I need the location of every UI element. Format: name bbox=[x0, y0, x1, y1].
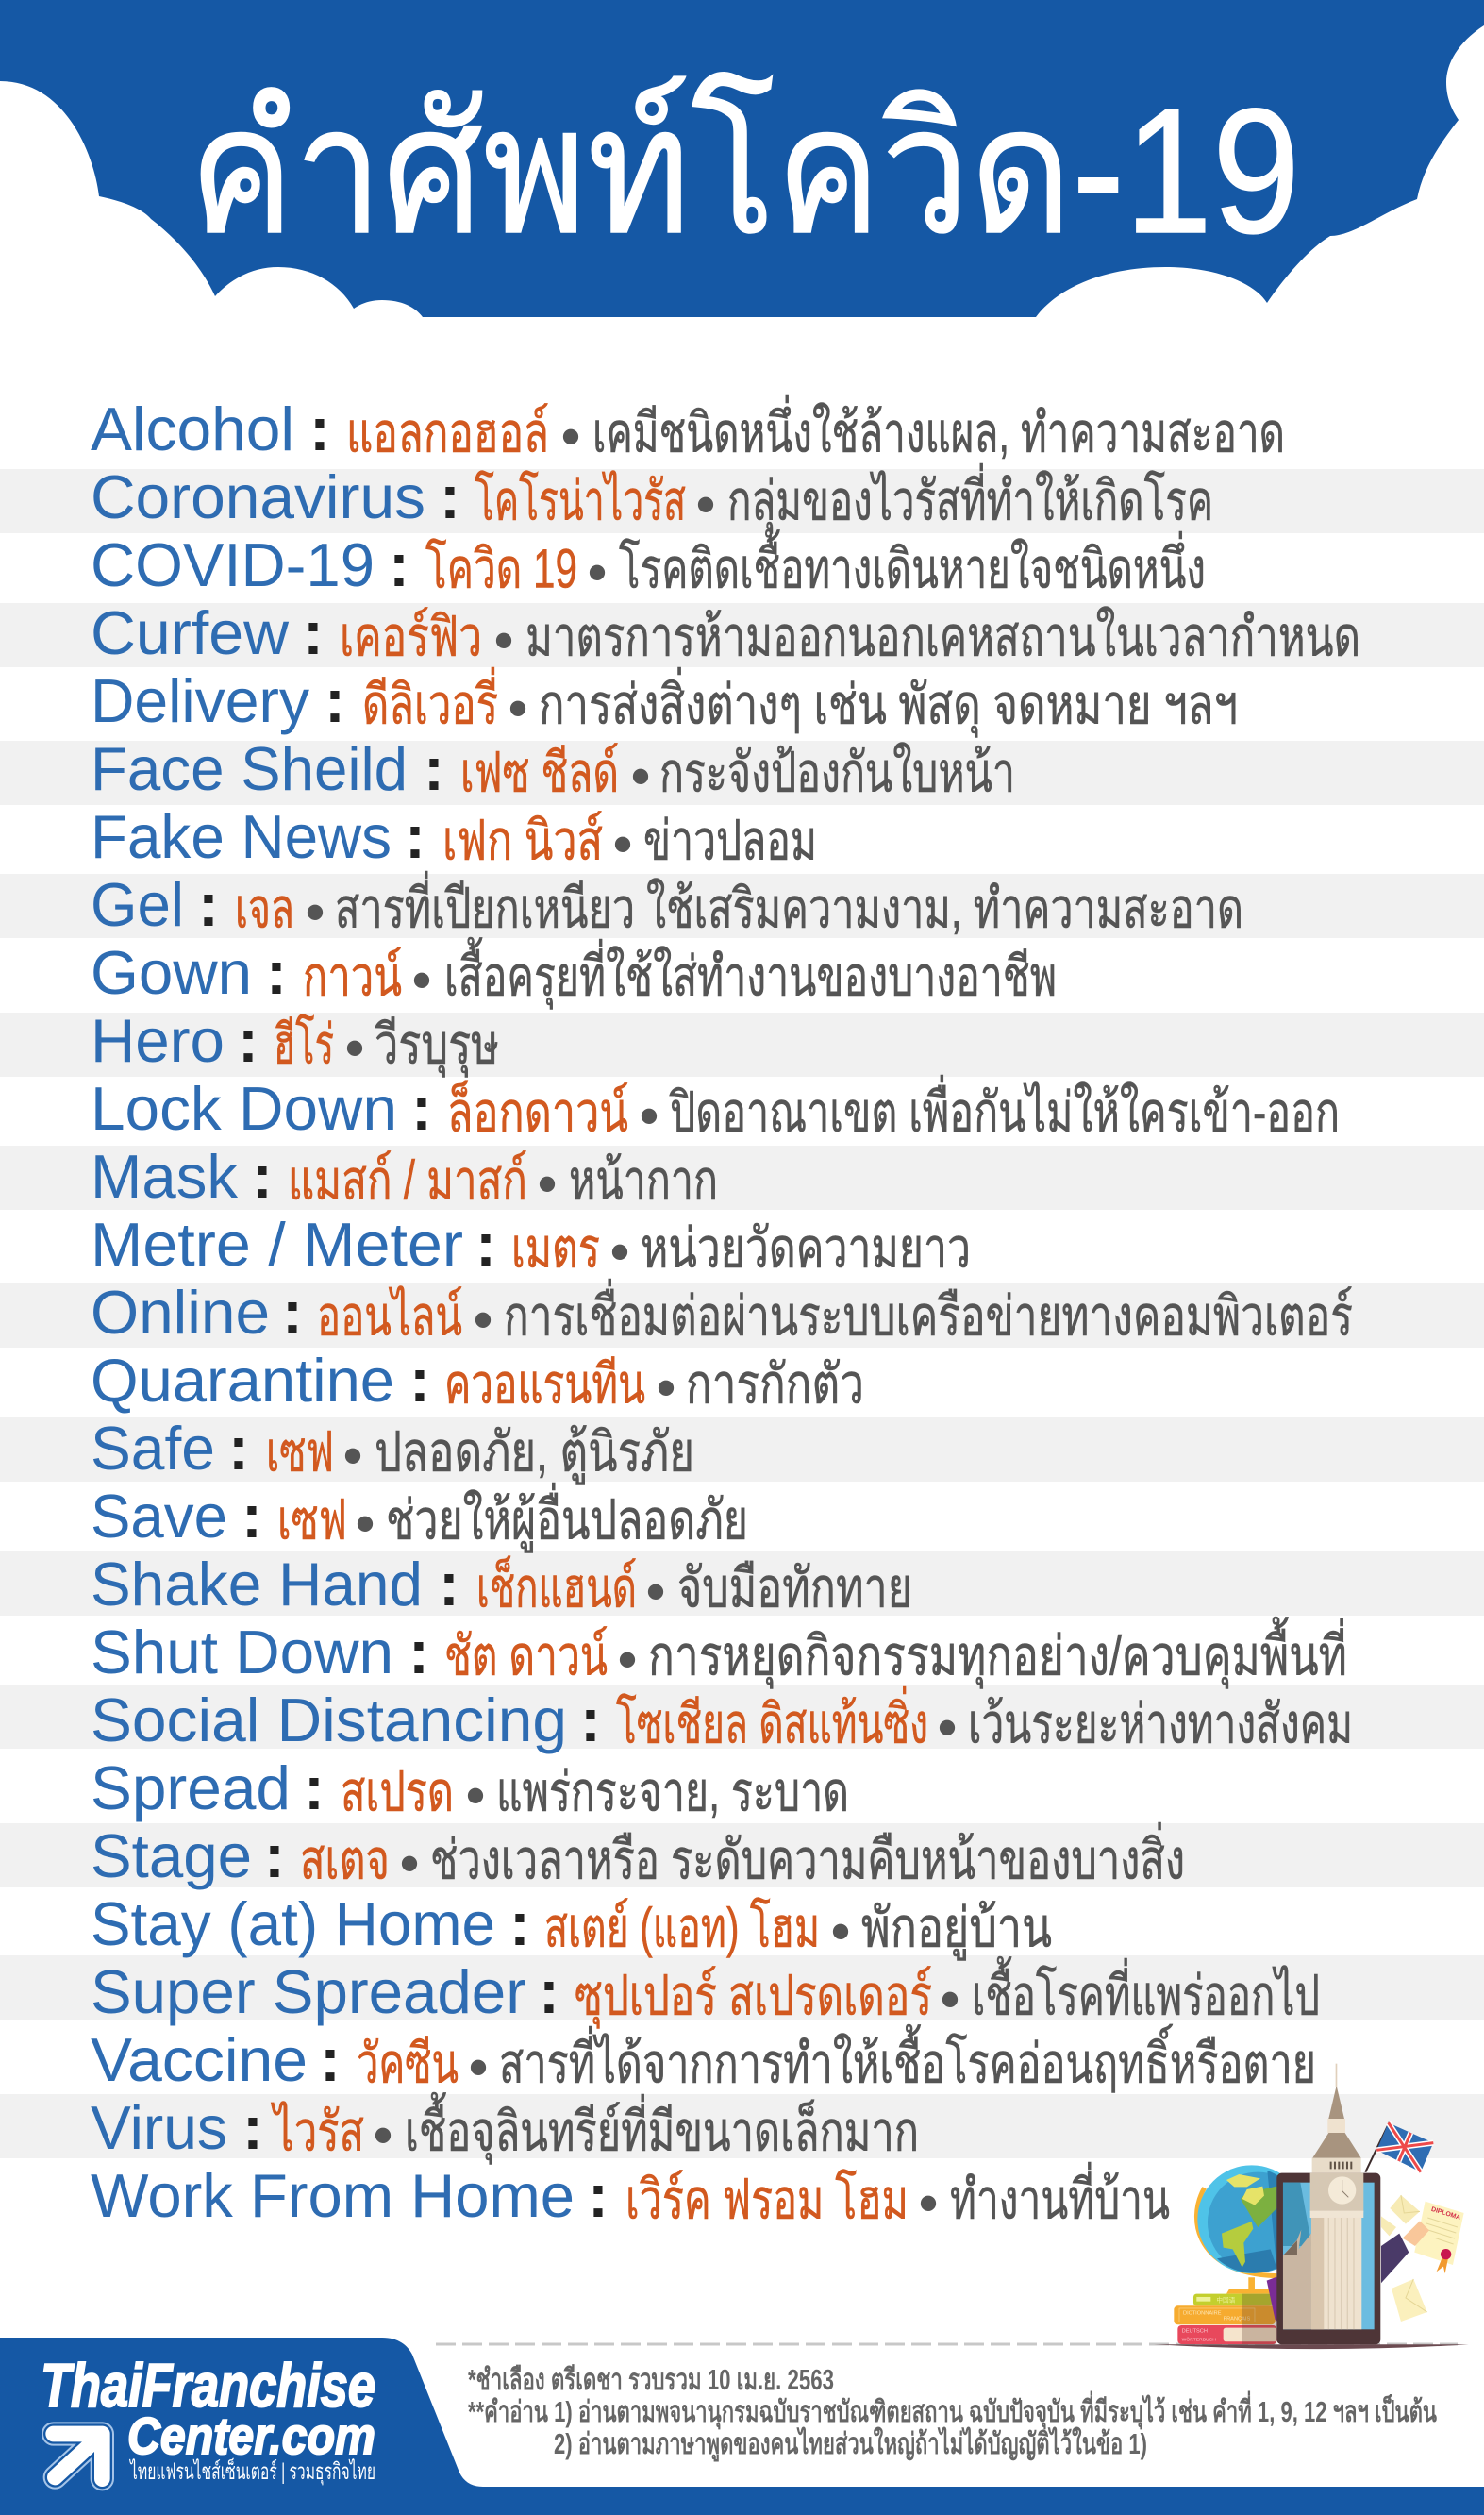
row: Fake News: : bbox=[405, 802, 425, 871]
footnotes bbox=[468, 2363, 1437, 2462]
row: Fake News: • bbox=[612, 813, 633, 876]
row: Online: • bbox=[473, 1288, 493, 1351]
illustration: globe, books, tablet, tower, flag, diploma: 中国语 bbox=[1216, 2295, 1236, 2304]
row: Gel: Gel bbox=[91, 870, 184, 939]
row: Metre / Meter: หน่วยวัดความยาว bbox=[641, 1217, 971, 1280]
row: Safe: : bbox=[228, 1414, 249, 1483]
row: Social Distancing: เว้นระยะห่างทางสังคม bbox=[968, 1693, 1353, 1755]
row: Gel: • bbox=[305, 880, 325, 944]
row: Vaccine: Vaccine bbox=[91, 2025, 308, 2094]
row: Hero: • bbox=[344, 1016, 365, 1080]
row: Save: Save bbox=[91, 1482, 227, 1551]
row: Metre / Meter: • bbox=[609, 1220, 630, 1283]
row: Hero: : bbox=[238, 1006, 258, 1075]
row: Quarantine: • bbox=[656, 1356, 676, 1419]
row: Spread bbox=[91, 1753, 849, 1827]
row: Shake Hand: เช็กแฮนด์ bbox=[476, 1555, 637, 1619]
row: COVID-19: • bbox=[587, 541, 608, 604]
row: Work From Home: ทำงานที่บ้าน bbox=[950, 2161, 1170, 2231]
row: Vaccine: • bbox=[468, 2036, 489, 2099]
row: Virus bbox=[91, 2093, 919, 2167]
row: Lock Down bbox=[91, 1074, 1340, 1148]
dashed divider bbox=[436, 2342, 1458, 2346]
row: Save: • bbox=[355, 1492, 375, 1555]
row: Vaccine: : bbox=[320, 2025, 341, 2094]
row: Super Spreader: : bbox=[539, 1957, 559, 2026]
row: Save: เซฟ bbox=[277, 1489, 347, 1551]
row: Delivery: Delivery bbox=[91, 666, 309, 735]
row: Super Spreader: ซุปเปอร์ สเปรดเดอร์ bbox=[575, 1965, 932, 2029]
row: Metre / Meter: เมตร bbox=[511, 1217, 600, 1280]
row: Spread: • bbox=[465, 1764, 486, 1827]
row: Delivery: การส่งสิ่งต่างๆ เช่น พัสดุ จดหมาย ฯลฯ bbox=[539, 666, 1238, 738]
illustration: globe, books, tablet, tower, flag, diploma bbox=[1154, 2064, 1469, 2349]
row: Stage bbox=[91, 1821, 1185, 1895]
row: Gown bbox=[91, 938, 1057, 1012]
row: Work From Home: Work From Home bbox=[91, 2161, 575, 2230]
row: Face Sheild: • bbox=[630, 745, 651, 808]
row: Virus: • bbox=[373, 2104, 393, 2167]
illustration: globe, books, tablet, tower, flag, diploma: WÖRTERBUCH bbox=[1182, 2337, 1216, 2343]
row: Stay (at) Home: • bbox=[830, 1900, 851, 1963]
row: Virus: ไวรัส bbox=[271, 2101, 364, 2163]
row: Super Spreader: เชื้อโรคที่แพร่ออกไป bbox=[972, 1957, 1320, 2027]
row: Face Sheild: กระจังป้องกันใบหน้า bbox=[659, 742, 1015, 804]
row: Alcohol: แอลกอฮอล์ bbox=[346, 402, 549, 464]
row: Social Distancing bbox=[91, 1685, 1353, 1759]
row: Super Spreader: Super Spreader bbox=[91, 1957, 526, 2026]
row: Metre / Meter: Metre / Meter bbox=[91, 1210, 463, 1279]
row: Shake Hand: : bbox=[439, 1550, 459, 1618]
footnotes: *ชำเลือง ตรีเดชา รวบรวม 10 เม.ย. 2563 bbox=[468, 2363, 834, 2396]
row: Stage: • bbox=[399, 1832, 420, 1895]
row: Safe: • bbox=[342, 1424, 363, 1487]
row: Work From Home: : bbox=[588, 2161, 609, 2230]
row: Mask: หน้ากาก bbox=[569, 1149, 718, 1212]
row: Metre / Meter bbox=[91, 1210, 971, 1283]
row: Shut Down: • bbox=[617, 1628, 638, 1691]
row: Quarantine: ควอแรนทีน bbox=[444, 1353, 645, 1416]
row: Save: : bbox=[242, 1482, 262, 1551]
logo: ThaiFranchise Center.com bbox=[41, 2351, 375, 2486]
row: Vaccine: วัคซีน bbox=[357, 2033, 459, 2095]
row: Online: : bbox=[282, 1278, 303, 1347]
row: COVID-19: COVID-19 bbox=[91, 530, 375, 599]
row: Lock Down: ล็อกดาวน์ bbox=[447, 1080, 628, 1144]
row: Mask: แมสก์ / มาสก์ bbox=[288, 1149, 527, 1212]
row: Save bbox=[91, 1482, 748, 1555]
row: Hero: วีรบุรุษ bbox=[375, 1014, 499, 1078]
row: Fake News: เฟก นิวส์ bbox=[442, 810, 603, 872]
row: Safe: Safe bbox=[91, 1414, 215, 1483]
illustration: globe, books, tablet, tower, flag, diploma: DIPLOMA bbox=[1430, 2206, 1461, 2222]
row: Gel bbox=[91, 870, 1243, 944]
row: Alcohol: • bbox=[560, 405, 581, 468]
row: Coronavirus: Coronavirus bbox=[91, 462, 425, 531]
row: Work From Home: เวิร์ค ฟรอม โฮม bbox=[625, 2169, 909, 2231]
logo: ThaiFranchise Center.com: Center.com bbox=[127, 2406, 375, 2465]
row: Fake News: ข่าวปลอม bbox=[643, 810, 817, 872]
row: Safe bbox=[91, 1414, 694, 1487]
row: Gel: เจล bbox=[235, 878, 294, 940]
logo: ThaiFranchise Center.com: ไทยแฟรนไชส์เซ็นเตอร์ | รวมธุรกิจไทย bbox=[129, 2457, 375, 2486]
row: Online bbox=[91, 1278, 1353, 1351]
row: Shake Hand bbox=[91, 1550, 912, 1623]
row: Super Spreader bbox=[91, 1957, 1320, 2031]
row: Virus: Virus bbox=[91, 2093, 227, 2162]
row: Coronavirus: • bbox=[695, 473, 716, 536]
row: Alcohol bbox=[91, 394, 1285, 468]
row: Face Sheild: : bbox=[424, 734, 444, 803]
row: Safe: เซฟ bbox=[266, 1421, 334, 1484]
row: Stay (at) Home bbox=[91, 1889, 1052, 1963]
row: Safe: ปลอดภัย, ตู้นิรภัย bbox=[375, 1421, 694, 1485]
row: Delivery: ดีลิเวอรี่ bbox=[362, 666, 498, 736]
row: Hero: ฮีโร่ bbox=[274, 1014, 334, 1076]
row: Face Sheild: เฟซ ชีลด์ bbox=[460, 742, 619, 804]
header: blue cloud banner bbox=[0, 0, 1484, 317]
row: Stay (at) Home: : bbox=[509, 1889, 530, 1958]
row: Alcohol: : bbox=[309, 394, 330, 463]
row: Face Sheild: Face Sheild bbox=[91, 734, 408, 803]
row: Curfew: Curfew bbox=[91, 598, 290, 667]
row: Social Distancing: โซเชียล ดิสแท้นซิ่ง bbox=[616, 1685, 928, 1755]
row: Stay (at) Home: พักอยู่บ้าน bbox=[861, 1897, 1052, 1961]
row: Fake News: Fake News bbox=[91, 802, 392, 871]
title: คำศัพท์โควิด-19 bbox=[189, 72, 1300, 270]
row: Virus: : bbox=[242, 2093, 263, 2162]
row: Shake Hand: • bbox=[645, 1560, 666, 1623]
row: Stage: ช่วงเวลาหรือ ระดับความคืบหน้าของบางสิ่ง bbox=[430, 1821, 1185, 1891]
row: Mask: : bbox=[252, 1142, 273, 1211]
row: Gel: : bbox=[198, 870, 219, 939]
row: Shut Down: ชัต ดาวน์ bbox=[444, 1625, 608, 1687]
row: Quarantine: การกักตัว bbox=[686, 1353, 864, 1416]
logo: ThaiFranchise Center.com: ThaiFranchise bbox=[41, 2351, 375, 2420]
alternating row bands bbox=[0, 469, 1484, 2158]
row: Shut Down: Shut Down bbox=[91, 1618, 393, 1686]
row: Gown: Gown bbox=[91, 938, 252, 1007]
row: Stage: : bbox=[264, 1821, 285, 1890]
row: Quarantine bbox=[91, 1346, 864, 1419]
row: Delivery: : bbox=[325, 666, 345, 735]
illustration: globe, books, tablet, tower, flag, diploma: DICTIONNAIRE bbox=[1183, 2311, 1222, 2317]
row: Quarantine: : bbox=[409, 1346, 430, 1415]
row: Curfew: • bbox=[493, 609, 514, 672]
row: Gown: • bbox=[411, 948, 432, 1012]
footnotes: 2) อ่านตามภาษาพูดของคนไทยส่วนใหญ่ถ้าไม่ได้บัญญัติไว้ในข้อ 1) bbox=[554, 2426, 1147, 2462]
row: Quarantine: Quarantine bbox=[91, 1346, 394, 1415]
row: Delivery: • bbox=[508, 677, 528, 740]
row: Work From Home: • bbox=[918, 2171, 939, 2235]
row: Fake News bbox=[91, 802, 817, 876]
row: Coronavirus: กลุ่มของไวรัสที่ทำให้เกิดโรค bbox=[727, 462, 1213, 534]
illustration: globe, books, tablet, tower, flag, diploma: FRANÇAIS bbox=[1224, 2317, 1250, 2322]
row: Online: ออนไลน์ bbox=[317, 1285, 462, 1348]
row: Mask: • bbox=[537, 1152, 558, 1216]
row: Online: Online bbox=[91, 1278, 270, 1347]
row: COVID-19: โควิด 19 bbox=[425, 538, 577, 600]
row: Face Sheild bbox=[91, 734, 1015, 808]
row: Social Distancing: : bbox=[580, 1685, 601, 1754]
row: Gown: กาวน์ bbox=[303, 946, 402, 1008]
row: Spread: Spread bbox=[91, 1753, 291, 1822]
row: Work From Home bbox=[91, 2161, 1170, 2235]
row: Delivery bbox=[91, 666, 1238, 740]
row: Metre / Meter: : bbox=[475, 1210, 496, 1279]
row: Coronavirus: โคโรน่าไวรัส bbox=[475, 470, 686, 532]
row: COVID-19: : bbox=[389, 530, 409, 599]
row: Virus: เชื้อจุลินทรีย์ที่มีขนาดเล็กมาก bbox=[405, 2093, 919, 2165]
row: Gown: เสื้อครุยที่ใช้ใส่ทำงานของบางอาชีพ bbox=[444, 938, 1057, 1010]
row: Shut Down bbox=[91, 1618, 1347, 1691]
row: Curfew: เคอร์ฟิว bbox=[340, 606, 482, 668]
row: Alcohol: Alcohol bbox=[91, 394, 294, 463]
row: Curfew bbox=[91, 598, 1360, 672]
row: Lock Down: Lock Down bbox=[91, 1074, 397, 1143]
row: Spread: : bbox=[304, 1753, 325, 1822]
row: Vaccine bbox=[91, 2023, 1316, 2099]
row: Hero: Hero bbox=[91, 1006, 225, 1075]
row: Lock Down: : bbox=[411, 1074, 432, 1143]
row: Stage: สเตจ bbox=[300, 1829, 390, 1891]
row: Coronavirus: : bbox=[440, 462, 460, 531]
illustration: globe, books, tablet, tower, flag, diploma: DEUTSCH bbox=[1182, 2329, 1208, 2335]
row: Stage: Stage bbox=[91, 1821, 252, 1890]
row: Social Distancing: Social Distancing bbox=[91, 1685, 567, 1754]
row: Gown: : bbox=[266, 938, 287, 1007]
row: Stay (at) Home: สเตย์ (แอท) โฮม bbox=[544, 1897, 820, 1959]
row: Stay (at) Home: Stay (at) Home bbox=[91, 1889, 495, 1958]
row: Shut Down: : bbox=[409, 1618, 429, 1686]
row: Save: ช่วยให้ผู้อื่นปลอดภัย bbox=[386, 1482, 748, 1553]
footer: blue tab and bottom strip bbox=[0, 2338, 1484, 2515]
row: Super Spreader: • bbox=[940, 1968, 960, 2031]
row: Lock Down: • bbox=[639, 1084, 659, 1148]
row: Coronavirus bbox=[91, 462, 1213, 536]
row: Mask bbox=[91, 1142, 718, 1216]
row: COVID-19: โรคติดเชื้อทางเดินหายใจชนิดหนึ่ง bbox=[619, 530, 1206, 600]
row: Spread: สเปรด bbox=[341, 1761, 454, 1823]
row: Social Distancing: • bbox=[937, 1696, 958, 1759]
row: Curfew: : bbox=[303, 598, 324, 667]
row: Shake Hand: จับมือทักทาย bbox=[677, 1557, 912, 1619]
row: Spread: แพร่กระจาย, ระบาด bbox=[496, 1761, 849, 1823]
row: Mask: Mask bbox=[91, 1142, 239, 1211]
row: Shake Hand: Shake Hand bbox=[91, 1550, 423, 1618]
row: COVID-19 bbox=[91, 530, 1206, 604]
row: Hero bbox=[91, 1006, 499, 1080]
